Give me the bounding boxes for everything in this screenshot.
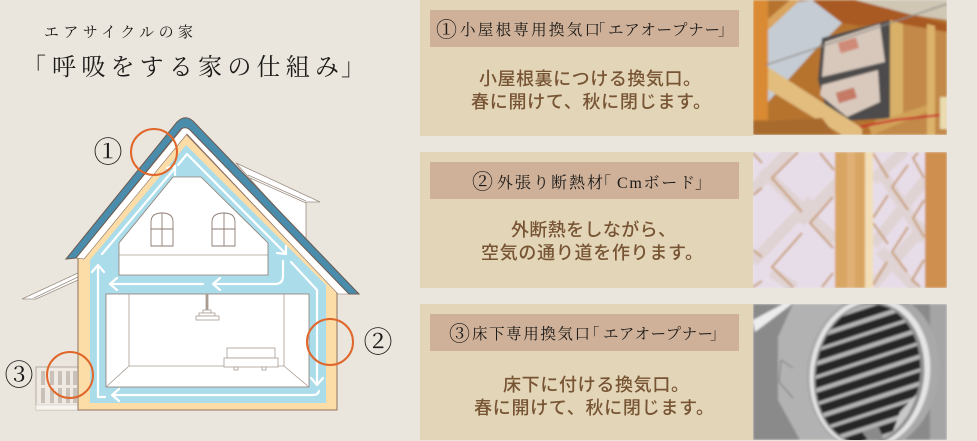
back house right <box>236 163 320 240</box>
marker circle 3 <box>47 352 93 398</box>
heading text 3: 」 <box>710 326 726 343</box>
panel: underfloor vent <box>420 304 753 440</box>
ceiling lamp <box>196 294 219 320</box>
description 2: 空気の通り道を作ります。 <box>481 243 703 263</box>
heading text 2: ② <box>472 170 493 194</box>
heading text 2: 外張り断熱材 <box>497 174 603 192</box>
air layer <box>90 145 326 403</box>
heading text 3: ③ <box>449 322 470 346</box>
number 2: ② <box>363 326 393 359</box>
air flow arrows <box>92 154 323 401</box>
heading text 3: 床下専用換気口 <box>472 325 590 343</box>
heading bar 1 <box>430 10 739 47</box>
description 3: 春に開けて、秋に閉じます。 <box>474 398 714 418</box>
heading text 1: 」 <box>718 22 734 39</box>
heading text 3: 「 <box>584 325 600 343</box>
veranda railing <box>36 367 78 410</box>
house cross-section diagram <box>4 118 393 410</box>
photo: diamond insulation board <box>753 150 947 288</box>
marker circle 2 <box>307 319 353 365</box>
window right <box>212 213 235 246</box>
heading: 「 <box>22 54 46 81</box>
heading text 1: 「 <box>590 21 606 39</box>
back house left eave <box>22 273 78 299</box>
photo: attic vent boxes <box>753 0 947 135</box>
heading text 3: エアオープナー <box>603 325 713 343</box>
description 3: 床下に付ける換気口。 <box>503 375 689 395</box>
description 2 <box>481 219 703 263</box>
marker circle 1 <box>131 129 177 175</box>
roof <box>66 118 359 294</box>
window left <box>151 213 173 246</box>
heading text 2: 」 <box>695 175 711 192</box>
upper room <box>119 177 268 275</box>
subtitle: エアサイクルの家 <box>44 23 193 41</box>
insulation body <box>78 134 337 410</box>
heading text 2: 「 <box>595 174 611 192</box>
description 1: 小屋根裏につける換気口。 <box>479 69 701 89</box>
heading: 」 <box>341 55 365 81</box>
description 3 <box>474 375 714 418</box>
lower room <box>106 294 309 387</box>
heading text 1: ① <box>436 18 457 42</box>
number 3: ③ <box>4 359 34 392</box>
heading text 1: 小屋根専用換気口 <box>460 20 600 39</box>
description 2: 外断熱をしながら、 <box>511 219 676 240</box>
number 1: ① <box>93 136 123 169</box>
panel: exterior insulation <box>420 152 753 288</box>
description 1: 春に開けて、秋に閉じます。 <box>471 92 711 112</box>
description 1 <box>471 69 711 112</box>
heading bar 2 <box>430 162 739 199</box>
photo: round vent grille <box>753 304 947 440</box>
heading bar 3 <box>430 314 739 351</box>
heading text 1: エアオープナー <box>608 21 720 39</box>
title block <box>22 23 365 81</box>
sofa <box>224 348 278 370</box>
heading text 2: Cmボード <box>617 174 695 192</box>
heading: 呼吸をする家の仕組み <box>52 54 339 81</box>
roof white underlayer <box>76 124 349 294</box>
panel: attic vent <box>420 0 753 136</box>
